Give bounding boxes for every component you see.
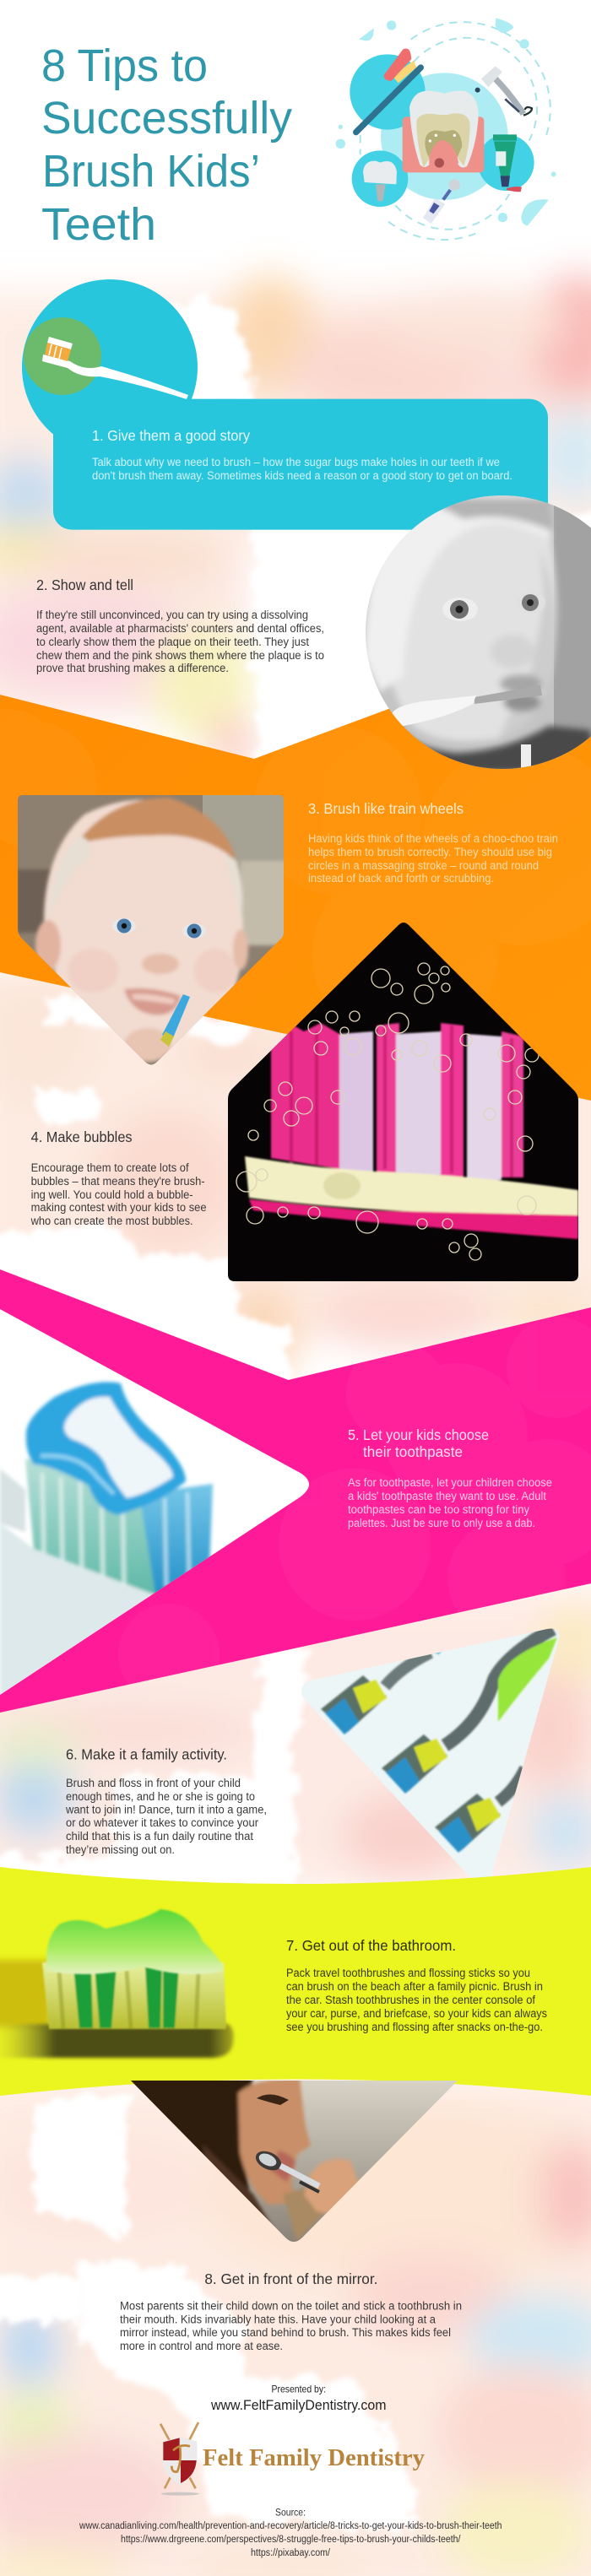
text block: As for toothpaste, let your children choose [348, 1476, 552, 1489]
text block: toothpastes can be too strong for tiny [348, 1503, 529, 1516]
text block: bubbles – that means they're brush- [31, 1175, 205, 1188]
title [41, 41, 292, 250]
panel: tip 2 text [36, 576, 324, 674]
source: https://www.drgreene.com/perspectives/8-struggle-free-tips-to-brush-your-childs-teeth/ [121, 2535, 461, 2545]
text block: Brush and floss in front of your child [66, 1777, 241, 1789]
title: Successfully [41, 93, 292, 143]
source: https://pixabay.com/ [251, 2548, 331, 2558]
heading: 4. Make bubbles [31, 1128, 133, 1145]
heading: 3. Brush like train wheels [308, 800, 464, 817]
text block: Encourage them to create lots of [31, 1161, 189, 1174]
text block: making contest with your kids to see [31, 1201, 207, 1214]
text block: instead of back and forth or scrubbing. [308, 872, 494, 885]
text block: see you brushing and flossing after snacks on-the-go. [286, 2021, 543, 2033]
heading: 2. Show and tell [36, 576, 133, 593]
panel: tip 3 text [308, 800, 558, 885]
heading: their toothpaste [363, 1443, 463, 1460]
icon: electric toothbrush [423, 179, 460, 224]
text block: If they're still unconvinced, you can try using a dissolving [36, 609, 308, 621]
heading: 1. Give them a good story [92, 427, 250, 444]
icon: dental illustration [336, 18, 556, 240]
icon: crest [160, 2422, 199, 2496]
photo: toothbrush with bubbles [224, 916, 583, 1287]
panel: pink band [0, 1269, 591, 1713]
panel: yellow band [0, 1867, 591, 2096]
text block: more in control and more at ease. [120, 2340, 283, 2352]
icon: toothbrush [356, 48, 420, 133]
text block: prove that brushing makes a difference. [36, 662, 229, 674]
text block: to clearly show them the plaque on their teeth. They just [36, 636, 309, 648]
panel: tip 1 [22, 279, 548, 530]
text block [286, 1967, 547, 2033]
photo: green toothpaste on brush [0, 1909, 234, 2058]
text block: child that this is a fun daily routine that [66, 1830, 253, 1843]
icon: toothpaste tube [493, 134, 522, 192]
panel: tip 7 text [286, 1937, 547, 2033]
text block [36, 609, 324, 674]
photo: child brushing, black and white [363, 494, 591, 772]
text block [120, 2299, 462, 2352]
text block: your car, purse, and briefcase, so your kids can always [286, 2007, 547, 2020]
text block: their mouth. Kids invariably hate this. Have your child looking at a [120, 2313, 436, 2326]
text block: they’re missing out on. [66, 1843, 175, 1856]
toothbrush 2 [382, 1629, 557, 1794]
text block: a kids' toothpaste they want to use. Adult [348, 1490, 546, 1502]
text block: ing well. You could hold a bubble- [31, 1188, 193, 1201]
text block: want to join in! Dance, turn it into a game, [65, 1803, 267, 1816]
icon: teal circle with toothbrush [22, 279, 198, 455]
presented by [210, 2384, 387, 2413]
photo: smiling baby [17, 793, 287, 1072]
text block [65, 1777, 267, 1856]
heading: 8. Get in front of the mirror. [204, 2270, 377, 2287]
title: 8 Tips to [41, 41, 208, 91]
text block: don't brush them away. Sometimes kids need a reason or a good story to get on board. [92, 469, 512, 482]
text block [30, 1161, 207, 1227]
panel: tip 5 text [348, 1426, 552, 1529]
text block [92, 456, 512, 482]
logo: Felt Family Dentistry [160, 2422, 425, 2496]
title: Teeth [41, 199, 156, 250]
photo: blue toothpaste on brush [0, 1304, 321, 1701]
text block: Most parents sit their child down on the toilet and stick a toothbrush in [120, 2299, 462, 2313]
title: Brush Kids’ [42, 146, 260, 197]
text block: chew them and the pink shows them where the plaque is to [36, 649, 324, 662]
text block: helps them to brush correctly. They should use big [308, 846, 552, 858]
text block: Talk about why we need to brush – how the sugar bugs make holes in our teeth if we [92, 456, 500, 468]
icon: tooth with gum [403, 90, 484, 172]
heading [348, 1426, 489, 1460]
text block [308, 832, 558, 885]
text block: or do whatever it takes to convince your [66, 1816, 258, 1829]
panel: tip 6 text [65, 1745, 267, 1856]
source [79, 2508, 502, 2558]
heading: 5. Let your kids choose [348, 1426, 489, 1443]
text block: Having kids think of the wheels of a choo-choo train [308, 832, 558, 845]
text block: who can create the most bubbles. [30, 1215, 193, 1227]
toothbrush 1 [320, 1652, 442, 1735]
text block: agent, available at pharmacists' counters and dental offices, [36, 622, 324, 635]
toothbrush 3 [435, 1768, 525, 1853]
panel: tip 4 text [30, 1128, 207, 1227]
icon: dental drill [475, 66, 532, 116]
source: www.canadianliving.com/health/prevention-and-recovery/article/8-tricks-to-get-your-kids-to-brush-their-teeth [79, 2521, 502, 2531]
photo: girl brushing in mirror [127, 2076, 464, 2245]
photo: three toothbrushes [301, 1629, 559, 1878]
panel: tip 8 text [120, 2270, 462, 2352]
logo wordmark: Felt Family Dentistry [203, 2444, 425, 2471]
presented by: www.FeltFamilyDentistry.com [210, 2397, 387, 2413]
text block: enough times, and he or she is going to [66, 1790, 255, 1803]
text block: Pack travel toothbrushes and flossing sticks so you [286, 1967, 530, 1979]
presented by: Presented by: [272, 2384, 326, 2395]
panel: orange band [0, 625, 591, 1101]
card [53, 399, 548, 530]
text block [348, 1476, 552, 1529]
text block: palettes. Just be sure to only use a dab. [348, 1517, 535, 1529]
text block: mirror instead, while you stand behind to brush. This makes kids feel [120, 2326, 451, 2339]
text block: the car. Stash toothbrushes in the center console of [286, 1994, 535, 2006]
source: Source: [275, 2508, 306, 2519]
text block: circles in a massaging stroke – round and round [308, 859, 539, 872]
icon: dental implant [363, 161, 397, 201]
heading: 6. Make it a family activity. [66, 1745, 227, 1762]
text block: can brush on the beach after a family picnic. Brush in [286, 1980, 543, 1993]
heading: 7. Get out of the bathroom. [286, 1937, 456, 1954]
